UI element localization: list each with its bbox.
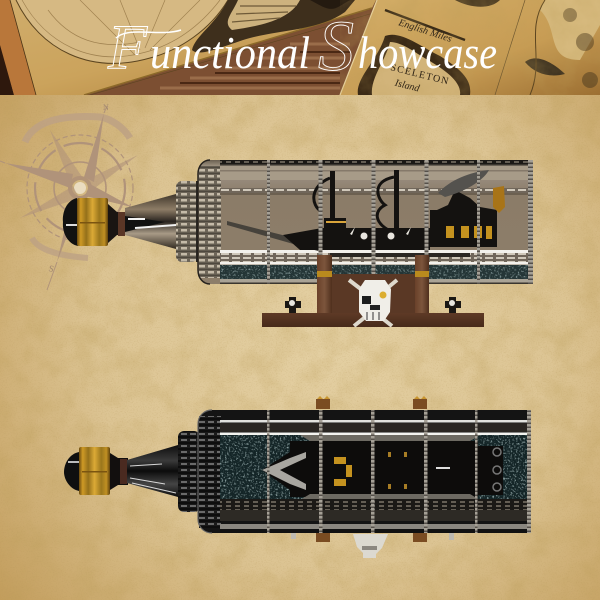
skull emblem: [349, 280, 397, 326]
bottle neck cone: [125, 194, 176, 249]
compass letter S: S: [48, 263, 55, 274]
map label: English Miles: English Miles: [396, 17, 453, 45]
top view vertical bars: [267, 410, 531, 533]
title: howcase: [358, 27, 497, 78]
clips on top view: [316, 396, 427, 542]
compass rings: [25, 116, 133, 258]
top gravel bed: [220, 435, 531, 510]
bottle side view: [63, 160, 533, 284]
stand right upright: [415, 255, 429, 313]
bottle cap: black dome: [63, 198, 78, 246]
map label: Sceleton Island: SCELETON: [389, 62, 451, 88]
bottle collar: [176, 181, 198, 262]
top collar: [178, 431, 200, 512]
ship masts and rigging: [314, 170, 399, 232]
right map sheet: [340, 0, 600, 101]
left map sheet: [0, 0, 376, 95]
bottle top view: [64, 396, 531, 558]
ship sail: grey canopy: [438, 170, 489, 197]
ship gold windows: [446, 226, 492, 239]
bottle body glass: [198, 160, 533, 284]
stand left peg: [285, 297, 301, 313]
map label: Sceleton Island: Island: [393, 78, 422, 95]
title: S: [318, 6, 354, 86]
ship seen from above: [262, 435, 503, 500]
ship stern lantern: [493, 186, 505, 213]
aquarium gravel strip: [220, 265, 533, 279]
ship hull: [283, 210, 497, 250]
title: unctional: [150, 27, 310, 78]
stand back panel: [332, 274, 415, 313]
stand right peg: [445, 297, 461, 313]
compass rose watermark: [0, 103, 138, 290]
stand base plate: [262, 313, 484, 327]
ship bowsprit: [227, 221, 322, 251]
top connector: [110, 453, 128, 490]
top cap: black dome: [64, 452, 79, 491]
ship side view: [227, 170, 505, 257]
small pegs seen from above: [291, 533, 454, 540]
compass needles: [5, 113, 138, 262]
stand left upright: [317, 255, 332, 313]
glass vertical bars: [267, 160, 533, 284]
ship white deck details: [350, 227, 411, 240]
skull seen from above: [353, 534, 388, 558]
top body glass: [198, 410, 531, 533]
header: antique maps banner: [0, 0, 600, 101]
wood tabletop: [14, 0, 376, 95]
top neck cone: [127, 445, 178, 497]
compass letter N: N: [103, 103, 109, 112]
top cap: gold band: [79, 447, 110, 495]
ship stern deck: [437, 190, 497, 210]
bottle cap: gold band: [77, 198, 108, 246]
display stand: [262, 255, 484, 327]
bottle connector: [108, 204, 126, 243]
title: [107, 6, 497, 86]
title: F: [107, 11, 148, 82]
